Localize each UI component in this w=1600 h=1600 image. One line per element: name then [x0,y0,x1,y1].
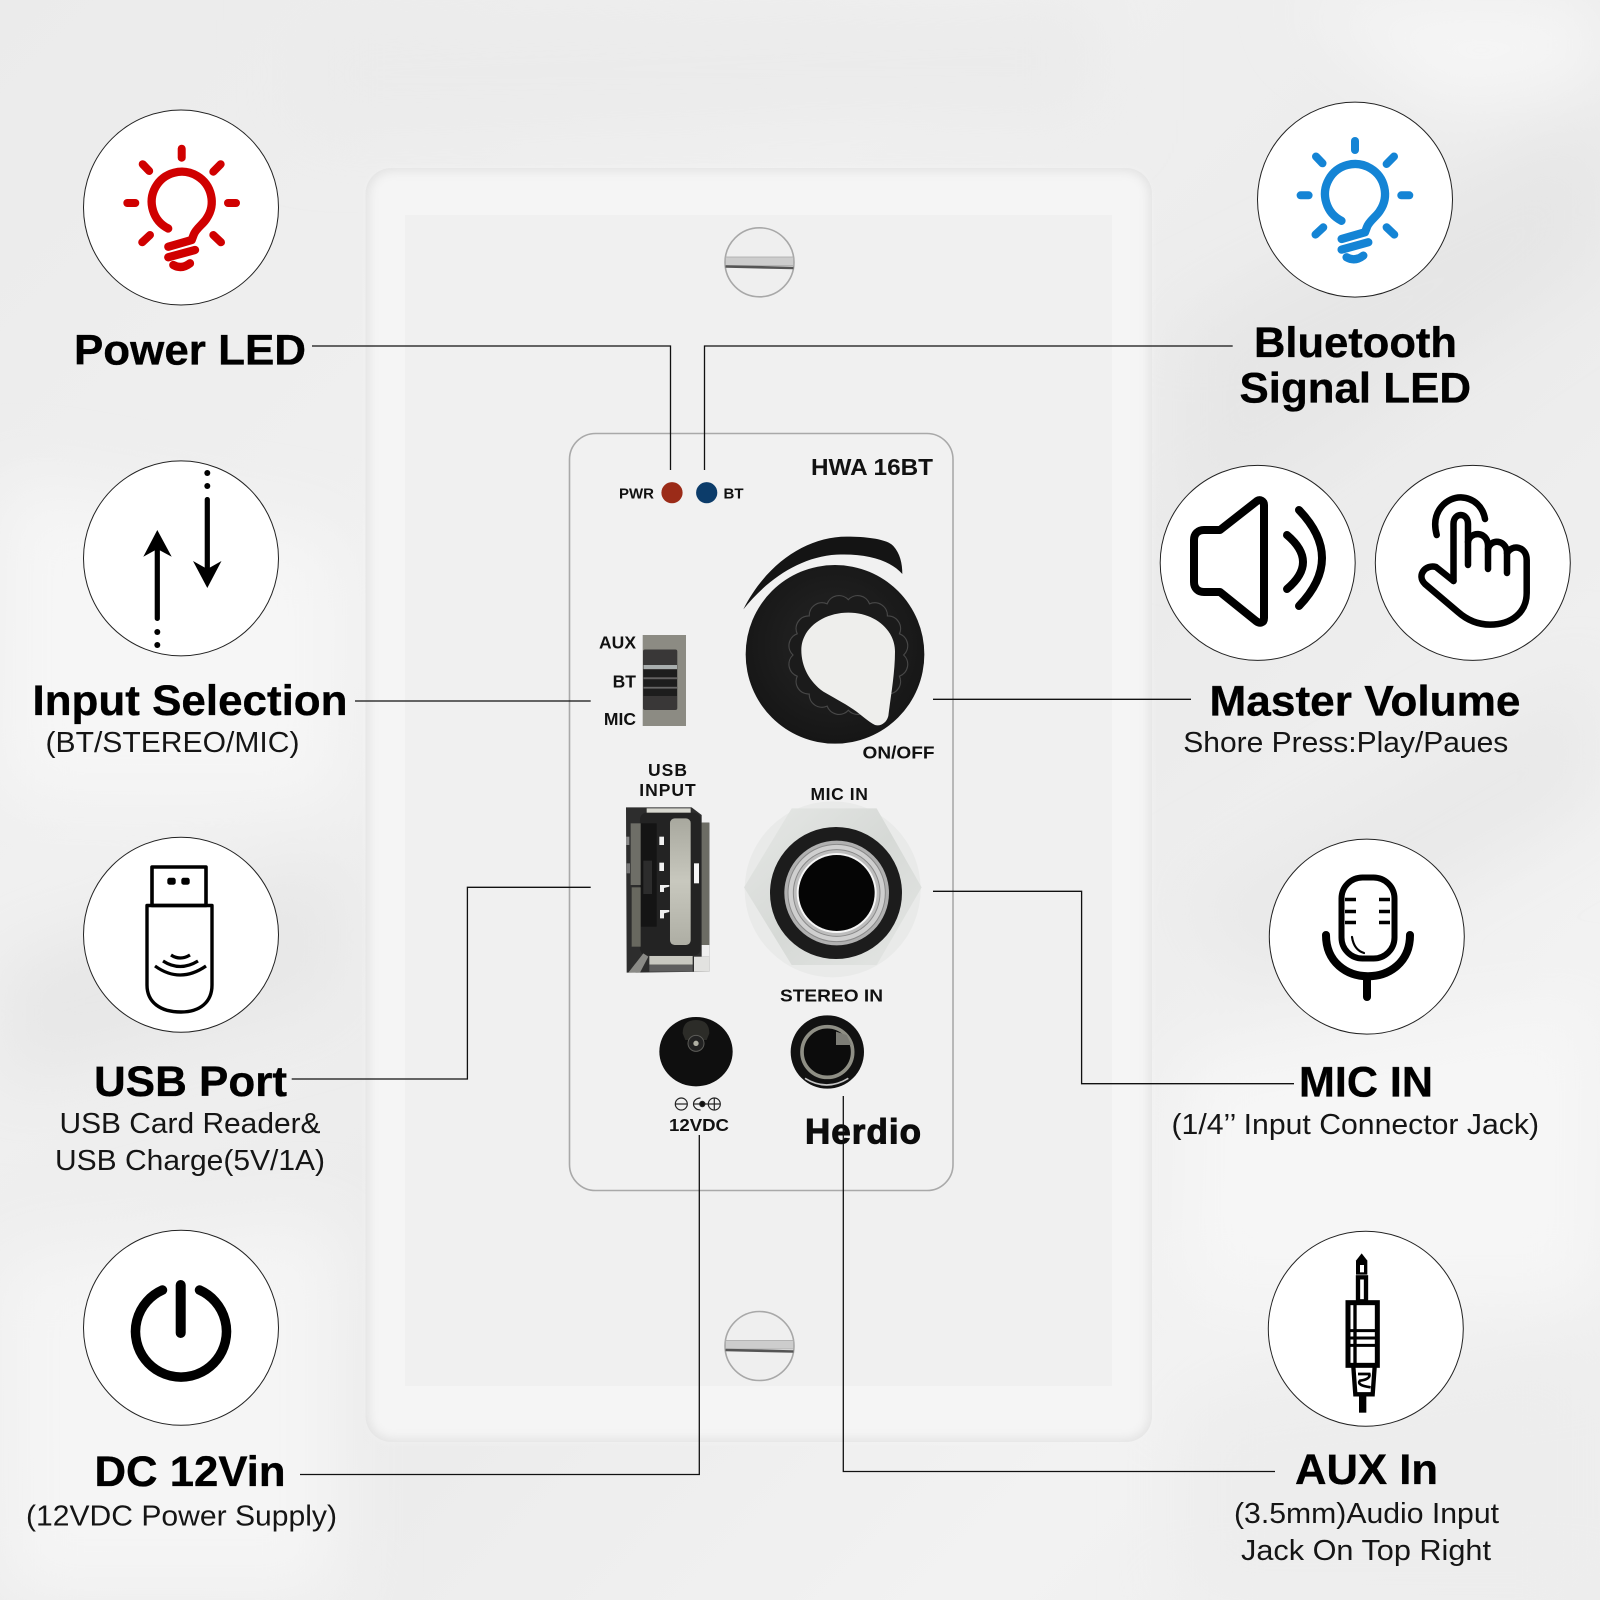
icon: power symbol [84,1230,278,1425]
control panel [570,434,953,1190]
icon: touch hand [1375,465,1570,660]
description: (3.5mm)Audio Input [1234,1498,1499,1530]
bottom screw [725,1312,794,1380]
power LED indicator [619,482,683,503]
stereo in jack: STEREO IN [780,986,883,1006]
subtitle: Shore Press:Play/Paues [1183,727,1508,759]
polarity symbol [675,1098,720,1110]
panel: input selection [32,461,348,759]
dc power jack [659,1017,733,1135]
usb port [626,760,709,973]
heading: Bluetooth [1254,319,1457,367]
heading: AUX In [1295,1446,1438,1494]
heading: Master Volume [1210,677,1520,725]
wall plate [366,168,1152,1442]
icon: red light bulb [84,110,278,305]
brand logo: Herdio [805,1112,921,1152]
bluetooth LED indicator [696,482,744,503]
heading: USB Port [94,1058,287,1106]
panel: power LED [74,110,306,374]
top screw [725,228,794,297]
usb port: INPUT [639,780,697,800]
panel: bluetooth signal LED [1240,102,1471,412]
panel: USB port [55,837,325,1177]
description: USB Charge(5V/1A) [55,1145,325,1177]
mic in jack [744,784,922,977]
description [55,1108,325,1177]
on/off label: ON/OFF [862,742,935,762]
heading: Signal LED [1240,364,1471,412]
icon: audio jack [1268,1231,1463,1426]
usb port: USB [648,760,688,780]
icon: usb stick [84,837,278,1032]
heading: MIC IN [1299,1058,1433,1106]
mic in jack: MIC IN [810,784,869,804]
heading: Input Selection [32,677,348,725]
heading: DC 12Vin [94,1448,286,1496]
input selector switch [599,632,686,729]
model name: HWA 16BT [811,454,933,480]
description: USB Card Reader& [60,1108,320,1140]
bluetooth LED indicator: BT [724,486,744,502]
dc power jack: 12VDC [669,1115,729,1135]
subtitle: (12VDC Power Supply) [26,1500,337,1532]
connector lines [292,346,1294,1474]
icon: speaker [1160,465,1355,660]
power LED indicator: PWR [619,486,655,502]
icon: microphone [1269,839,1464,1034]
subtitle: (BT/STEREO/MIC) [46,727,300,759]
description: Jack On Top Right [1241,1535,1491,1567]
heading: Power LED [74,326,306,374]
description [1234,1498,1499,1567]
subtitle: (1/4’’ Input Connector Jack) [1172,1109,1539,1141]
icon: up and down arrows [84,461,278,656]
heading [1240,319,1471,412]
panel: master volume [1160,465,1570,759]
input selector switch: MIC [604,709,636,729]
panel: AUX In [1234,1231,1499,1567]
panel: DC 12Vin [26,1230,337,1532]
icon: blue light bulb [1258,102,1452,297]
input selector switch: BT [613,672,636,692]
volume knob [743,537,924,744]
input selector switch: AUX [599,632,636,652]
panel: MIC IN [1172,839,1539,1141]
stereo in jack [780,986,883,1089]
